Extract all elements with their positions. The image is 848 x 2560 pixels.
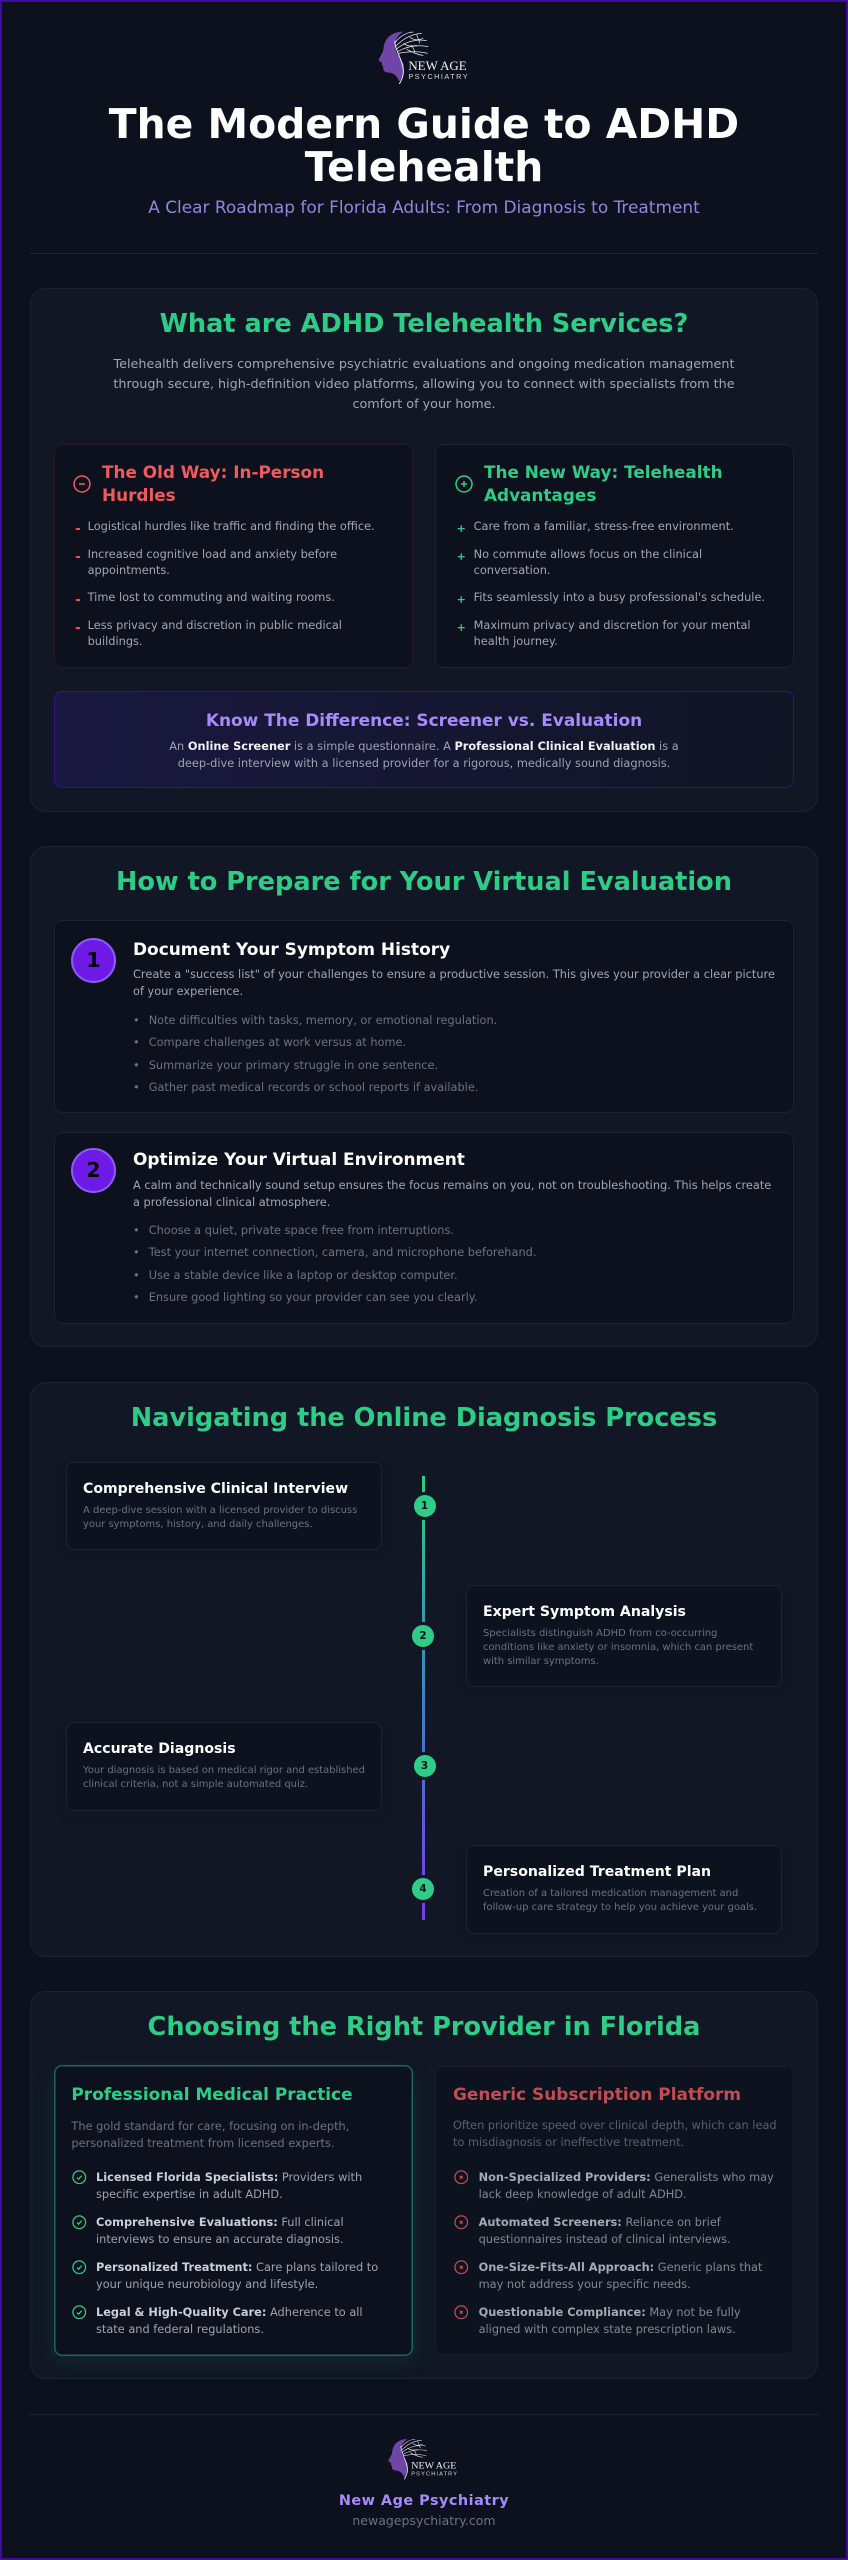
footer logo: [388, 2439, 457, 2480]
card 3 text: [83, 1765, 365, 1790]
timeline node 1: [410, 1492, 438, 1520]
old way marker 1: -: [75, 520, 81, 536]
professional item 1: specific expertise in adult ADHD.: [96, 2186, 283, 2200]
card 2 text: [483, 1628, 753, 1667]
card 4 text: Creation of a tailored medication management and: [483, 1888, 738, 1899]
new way item 3: Fits seamlessly into a busy professional's schedule.: [474, 590, 765, 604]
step 1 description: Create a "success list" of your challenges to ensure a productive session. This gives your provider a clear picture: [133, 967, 775, 981]
professional item 3: [96, 2260, 378, 2290]
callout heading: Know The Difference: Screener vs. Evaluation: [206, 710, 642, 730]
intro paragraph: Telehealth delivers comprehensive psychiatric evaluations and ongoing medication management: [114, 357, 734, 372]
icon: cross 2: [454, 2215, 468, 2230]
timeline node 1: 1: [421, 1500, 428, 1512]
old way marker 2: -: [75, 548, 81, 564]
step 1 checklist: •: [133, 1080, 140, 1094]
step 2 description: A calm and technically sound setup ensures the focus remains on you, not on troubleshooting. This helps create: [133, 1178, 771, 1192]
professional item 4: Legal & High-Quality Care: Adherence to all: [96, 2305, 363, 2319]
intro paragraph: [113, 357, 735, 412]
generic item 2: Automated Screeners: Reliance on brief: [479, 2215, 721, 2229]
icon: check 2: [72, 2215, 86, 2229]
step 2 description: [133, 1178, 771, 1208]
section heading: Navigating the Online Diagnosis Process: [131, 1403, 717, 1433]
old way heading: Hurdles: [102, 485, 176, 505]
icon: cross 3: [454, 2260, 468, 2274]
icon: plus circle: [455, 475, 473, 493]
old way item 4: [88, 618, 342, 648]
generic item 2: [478, 2215, 731, 2246]
step 1 checklist: [133, 1013, 497, 1094]
step card 1: [54, 920, 794, 1113]
step 2 checklist: •: [133, 1245, 140, 1259]
intro paragraph: comfort of your home.: [352, 397, 496, 412]
step 2 checklist: Ensure good lighting so your provider can see you clearly.: [149, 1290, 478, 1304]
section heading: What are ADHD Telehealth Services?: [160, 309, 688, 339]
generic item 3: One-Size-Fits-All Approach: Generic plans that: [479, 2260, 762, 2274]
subtitle: A Clear Roadmap for Florida Adults: From Diagnosis to Treatment: [148, 197, 700, 217]
timeline card 3: [66, 1722, 382, 1811]
generic item 3: may not address your specific needs.: [479, 2277, 691, 2291]
section heading: Choosing the Right Provider in Florida: [148, 2012, 700, 2042]
generic item 4: aligned with complex state prescription laws.: [479, 2322, 736, 2336]
new way heading: Advantages: [484, 485, 596, 505]
timeline node 4: [409, 1875, 437, 1903]
step 2 checklist: Choose a quiet, private space free from interruptions.: [149, 1223, 454, 1237]
generic item 4: [479, 2305, 741, 2336]
generic description: [453, 2118, 777, 2148]
section heading: How to Prepare for Your Virtual Evaluation: [116, 867, 732, 897]
step 2 description: a professional clinical atmosphere.: [133, 1194, 330, 1208]
old way item 2: Increased cognitive load and anxiety before: [88, 546, 337, 560]
step 1 checklist: Note difficulties with tasks, memory, or emotional regulation.: [149, 1013, 497, 1027]
header logo: NEW AGE: [408, 59, 467, 73]
timeline node 2: 2: [419, 1630, 427, 1642]
timeline card 1: [66, 1462, 382, 1550]
card 4 text: follow-up care strategy to help you achieve your goals.: [483, 1902, 757, 1913]
old way item 2: appointments.: [88, 563, 170, 577]
panel: new way: [435, 444, 794, 668]
card 2 text: with similar symptoms.: [483, 1656, 599, 1667]
icon: cross 4: [454, 2305, 468, 2320]
panel: diagnosis process timeline: [30, 1382, 818, 1957]
new way marker 3: +: [457, 592, 466, 606]
card 1 text: [83, 1505, 357, 1530]
step number 2: 2: [86, 1158, 101, 1182]
title: [108, 100, 739, 191]
step number 1: 1: [86, 948, 101, 972]
new way item 4: Maximum privacy and discretion for your mental: [474, 618, 751, 632]
step 1 checklist: Compare challenges at work versus at home.: [149, 1035, 406, 1049]
professional item 1: [96, 2170, 362, 2200]
professional item 2: interviews to ensure an accurate diagnosis.: [96, 2232, 344, 2246]
professional item 2: Comprehensive Evaluations: Full clinical: [96, 2215, 344, 2229]
professional description: [71, 2119, 349, 2150]
step number 1: [71, 938, 116, 983]
footer website: newagepsychiatry.com: [352, 2512, 496, 2528]
professional title: Professional Medical Practice: [71, 2084, 353, 2104]
header logo: PSYCHIATRY: [408, 72, 468, 81]
generic title: Generic Subscription Platform: [453, 2084, 741, 2104]
new way item 2: conversation.: [474, 563, 550, 577]
icon: minus circle: [73, 475, 91, 493]
generic item 1: [479, 2170, 774, 2201]
timeline line: [422, 1476, 425, 1920]
header logo: [378, 32, 468, 84]
callout text: [169, 739, 679, 770]
step 1 checklist: •: [133, 1013, 140, 1027]
old way item 2: [88, 546, 337, 577]
professional item 3: your unique neurobiology and lifestyle.: [96, 2276, 318, 2290]
step number 2: [71, 1148, 116, 1193]
old way marker 4: -: [75, 620, 81, 636]
card 1 title: Comprehensive Clinical Interview: [83, 1481, 348, 1497]
step 1 checklist: •: [133, 1058, 140, 1072]
old way item 4: Less privacy and discretion in public medical: [88, 618, 342, 632]
callout text: deep-dive interview with a licensed provider for a rigorous, medically sound diagnosis.: [178, 756, 670, 770]
card 3 title: Accurate Diagnosis: [83, 1741, 236, 1757]
step 1 title: Document Your Symptom History: [133, 939, 450, 959]
old way heading: The Old Way: In-Person: [102, 462, 324, 482]
title: Telehealth: [305, 143, 543, 191]
step 1 checklist: Summarize your primary struggle in one sentence.: [149, 1058, 438, 1072]
footer brand name: New Age Psychiatry: [339, 2493, 509, 2509]
step 2 checklist: •: [133, 1268, 140, 1282]
timeline node 3: 3: [421, 1760, 428, 1772]
step 2 checklist: •: [133, 1223, 140, 1237]
professional item 4: [96, 2305, 363, 2336]
card 1 text: your symptoms, history, and daily challenges.: [83, 1519, 313, 1530]
card 4 text: [483, 1888, 757, 1913]
card 2 title: Expert Symptom Analysis: [483, 1604, 686, 1620]
card 1 text: A deep-dive session with a licensed provider to discuss: [83, 1505, 357, 1516]
footer logo: NEW AGE: [411, 2460, 456, 2471]
new way item 4: health journey.: [474, 634, 558, 648]
step 2 checklist: Test your internet connection, camera, and microphone beforehand.: [149, 1245, 536, 1259]
intro paragraph: through secure, high-definition video platforms, allowing you to connect with specialists from the: [113, 377, 735, 392]
generic item 1: lack deep knowledge of adult ADHD.: [479, 2187, 687, 2201]
icon: check 4: [72, 2305, 86, 2319]
step card 2: [54, 1132, 794, 1324]
step 2 title: Optimize Your Virtual Environment: [133, 1149, 465, 1169]
old way item 1: Logistical hurdles like traffic and finding the office.: [88, 518, 375, 532]
step 1 description: of your experience.: [133, 984, 243, 998]
panel: what are ADHD telehealth services: [30, 288, 818, 812]
callout text: An Online Screener is a simple questionnaire. A Professional Clinical Evaluation is a: [169, 739, 679, 753]
card 4 title: Personalized Treatment Plan: [483, 1864, 711, 1880]
new way marker 2: +: [457, 550, 466, 562]
step 2 checklist: [133, 1223, 536, 1304]
timeline card 2: [466, 1585, 782, 1687]
generic item 3: [479, 2260, 762, 2291]
professional description: The gold standard for care, focusing on in-depth,: [71, 2119, 349, 2133]
professional description: personalized treatment from licensed experts.: [71, 2136, 334, 2150]
panel: old way: [54, 444, 413, 668]
panel: choosing the right provider: [30, 1991, 818, 2379]
step 2 checklist: Use a stable device like a laptop or desktop computer.: [149, 1268, 458, 1282]
panel: generic subscription platform: [435, 2066, 794, 2355]
panel: how to prepare: [30, 846, 818, 1347]
professional item 3: Personalized Treatment: Care plans tailored to: [96, 2260, 378, 2274]
title: The Modern Guide to ADHD: [109, 100, 739, 148]
new way marker 1: +: [457, 522, 466, 534]
generic item 2: questionnaires instead of clinical interviews.: [479, 2232, 731, 2246]
card 3 text: Your diagnosis is based on medical rigor and established: [83, 1765, 365, 1776]
card 2 text: Specialists distinguish ADHD from co-occurring: [483, 1628, 717, 1639]
panel: professional medical practice: [54, 2065, 413, 2356]
timeline node 4: 4: [419, 1883, 427, 1895]
new way item 2: [474, 546, 702, 577]
old way marker 3: -: [75, 592, 81, 608]
card 3 text: clinical criteria, not a simple automated quiz.: [83, 1779, 308, 1790]
generic item 4: Questionable Compliance: May not be fully: [479, 2305, 741, 2319]
new way item 4: [474, 618, 751, 648]
new way item 2: No commute allows focus on the clinical: [474, 546, 702, 560]
step 1 description: [133, 967, 775, 998]
new way heading: The New Way: Telehealth: [484, 462, 723, 482]
old way heading: [102, 462, 324, 505]
generic description: to misdiagnosis or ineffective treatment.: [453, 2134, 684, 2148]
timeline node 2: [409, 1622, 437, 1650]
professional item 4: state and federal regulations.: [96, 2322, 264, 2336]
new way marker 4: +: [457, 620, 466, 634]
professional item 1: Licensed Florida Specialists: Providers with: [96, 2170, 362, 2184]
icon: check 1: [72, 2170, 86, 2184]
new way heading: [484, 462, 723, 505]
icon: check 3: [72, 2260, 86, 2274]
card 2 text: conditions like anxiety or insomnia, which can present: [483, 1642, 753, 1653]
generic item 1: Non-Specialized Providers: Generalists who may: [479, 2170, 774, 2184]
timeline card 4: [466, 1845, 782, 1934]
new way item 1: Care from a familiar, stress-free environment.: [474, 518, 734, 532]
professional item 2: [96, 2215, 344, 2246]
old way item 3: Time lost to commuting and waiting rooms.: [88, 590, 335, 604]
step 1 checklist: Gather past medical records or school reports if available.: [149, 1080, 478, 1094]
footer logo: PSYCHIATRY: [411, 2471, 457, 2477]
generic description: Often prioritize speed over clinical depth, which can lead: [453, 2118, 777, 2132]
icon: cross 1: [454, 2170, 468, 2184]
step 1 checklist: •: [133, 1035, 140, 1049]
step 2 checklist: •: [133, 1290, 140, 1304]
old way item 4: buildings.: [88, 634, 143, 648]
callout: screener vs evaluation: [54, 691, 794, 788]
timeline node 3: [410, 1752, 438, 1780]
